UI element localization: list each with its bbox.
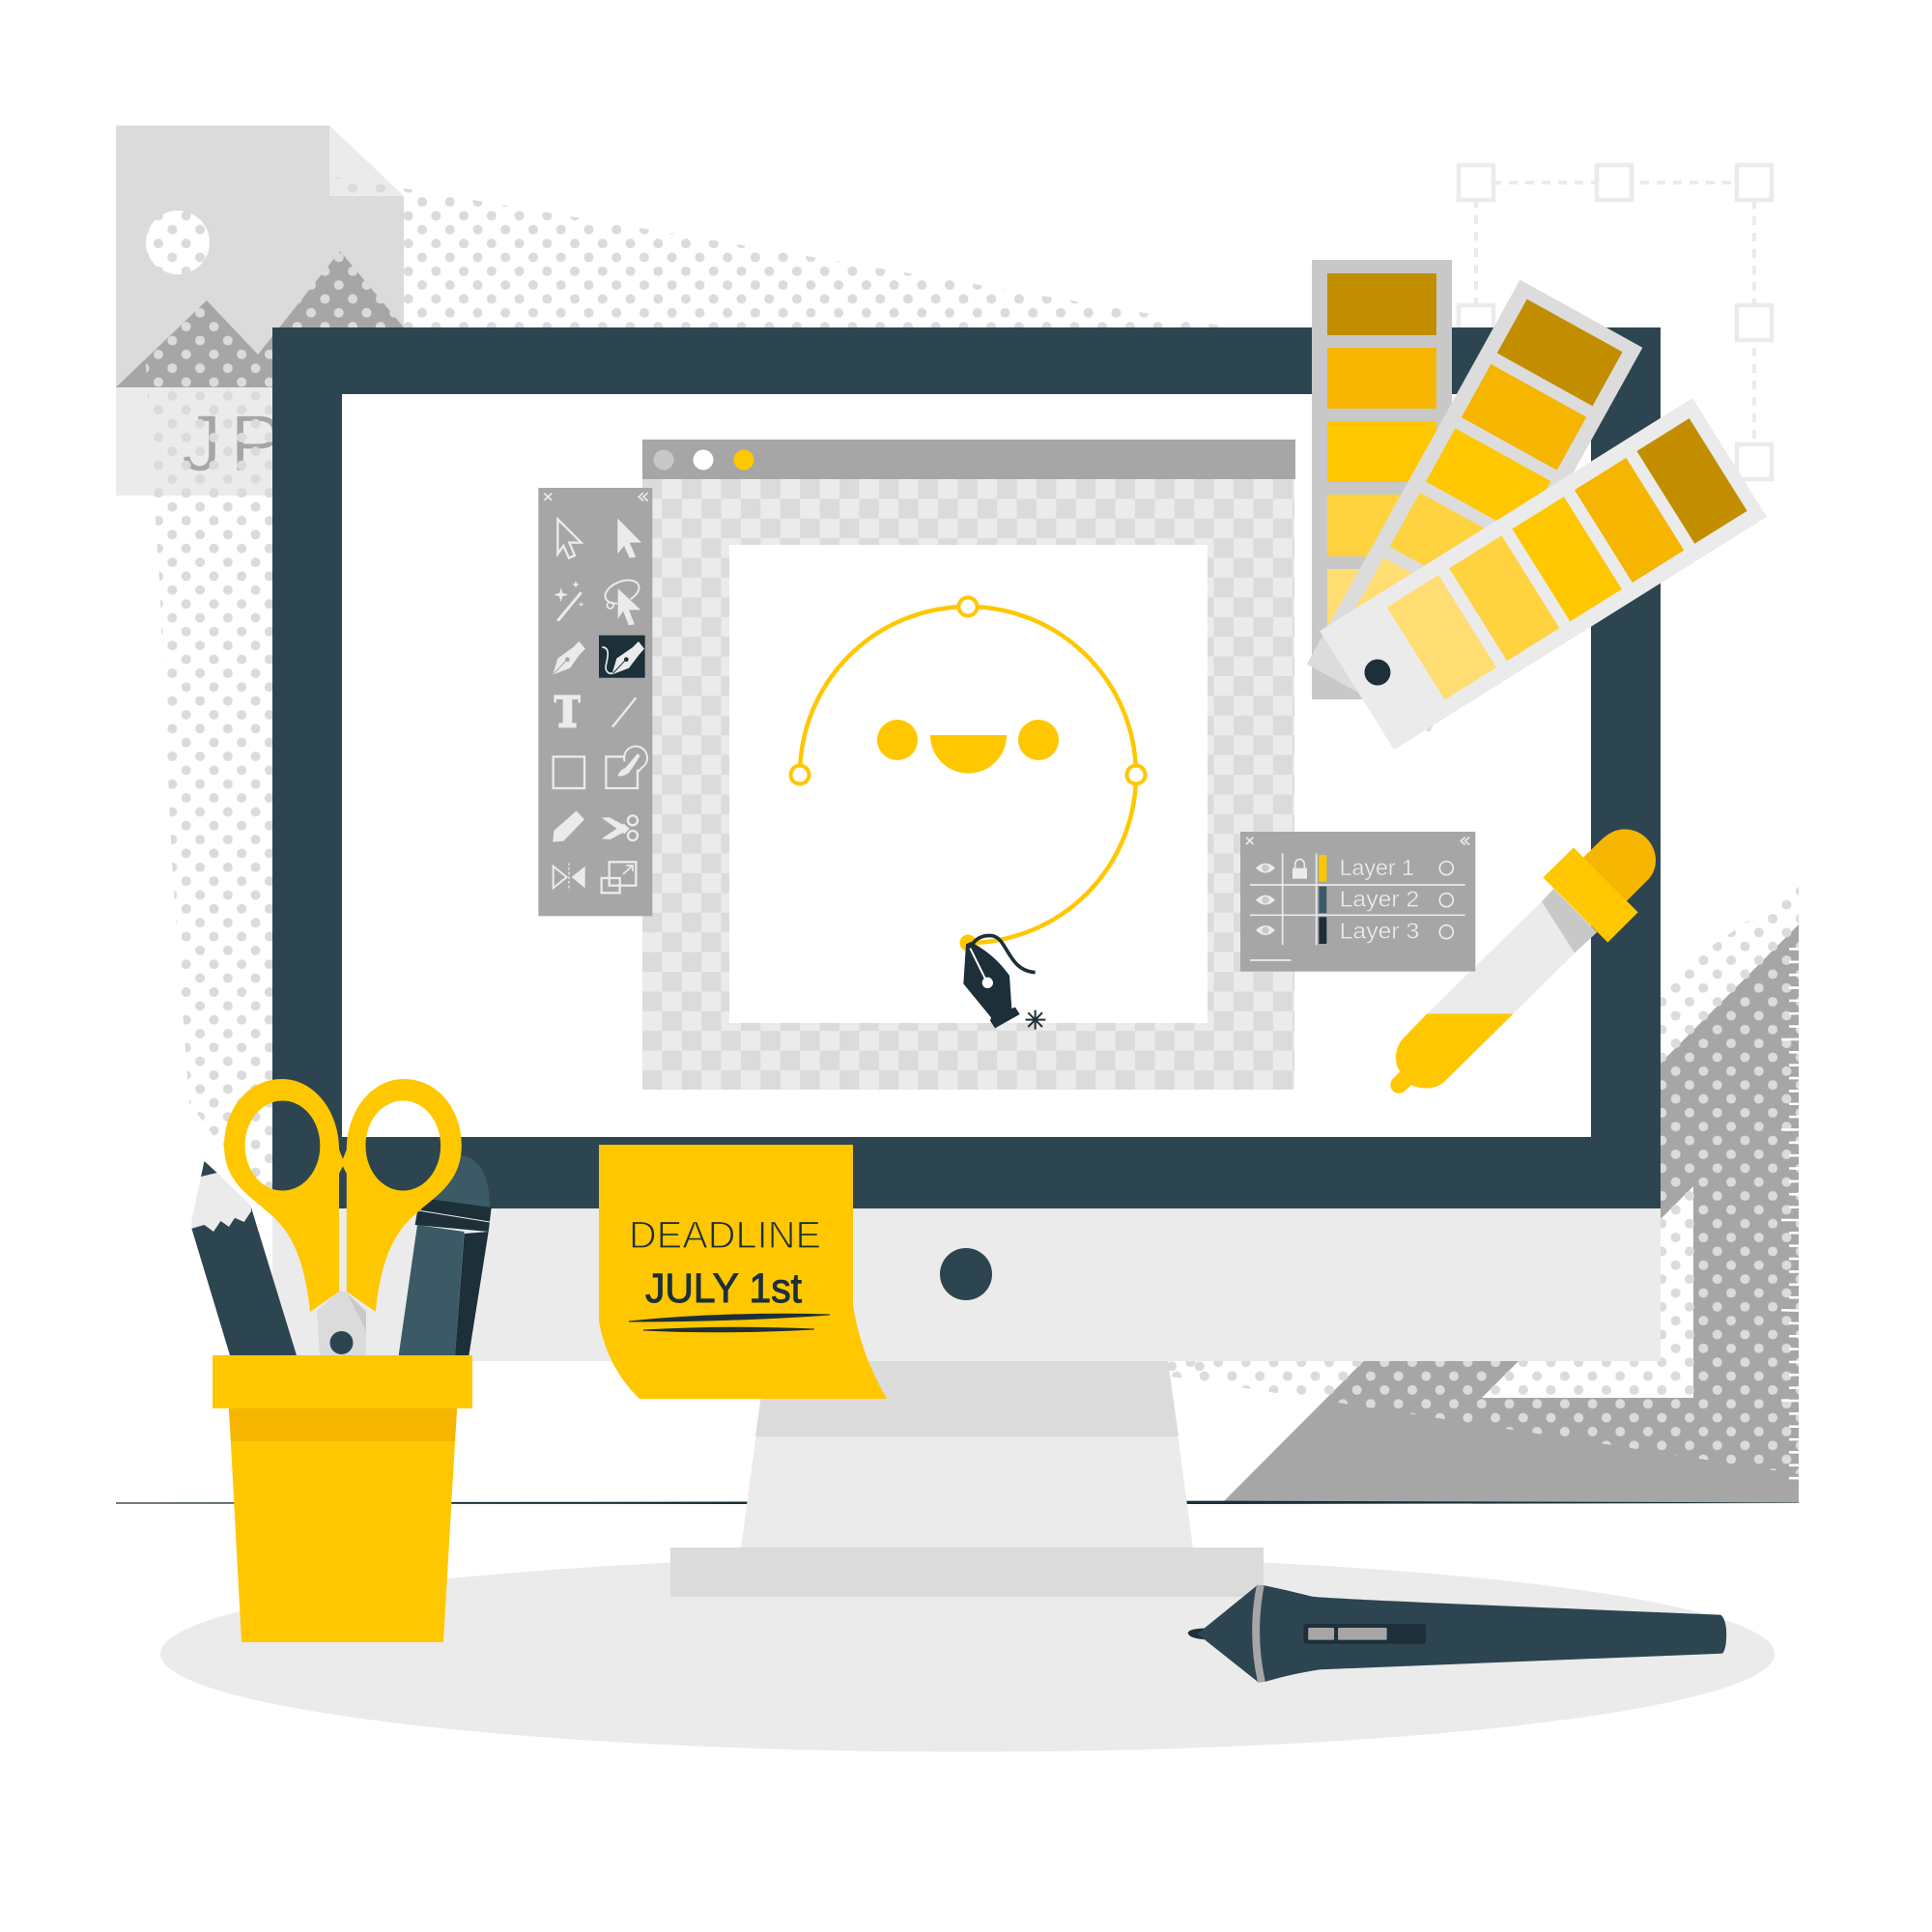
design app window (642, 440, 1295, 1090)
scissors (224, 1079, 462, 1355)
icon: reflect (554, 863, 585, 891)
swatch: tilted 29 degrees (1307, 280, 1642, 732)
icon: scissors (602, 815, 638, 840)
layers panel: Layer 2 (1340, 887, 1419, 912)
icon: pen (553, 641, 585, 674)
monitor (272, 327, 1661, 1361)
layers panel (1240, 832, 1475, 972)
pen holder contents (191, 1079, 492, 1355)
icon: pencil (553, 810, 584, 842)
smiley bezier drawing (790, 597, 1146, 951)
ruler ticks (1785, 942, 1795, 1480)
icon: line (612, 697, 636, 727)
icon: curvature pen selected (599, 636, 645, 678)
icon: selection arrow (557, 519, 582, 558)
icon: paint brush (606, 747, 647, 788)
marker (399, 1154, 492, 1355)
swatch: tilted 58 degrees (1320, 398, 1767, 750)
icon: lasso (602, 576, 642, 626)
date text: JULY 1st (645, 1265, 802, 1312)
layers panel: Layer 1 (1340, 855, 1414, 880)
selection handles (1459, 165, 1772, 479)
icon: type (554, 695, 581, 727)
dotted background pattern right (1159, 887, 1799, 1474)
deadline text: DEADLINE (629, 1214, 821, 1257)
layers panel: Layer 3 (1340, 919, 1419, 944)
dotted background pattern left (146, 145, 1220, 1375)
eyedropper (1390, 829, 1656, 1094)
stylus pen (1188, 1585, 1726, 1683)
pen tool cursor (963, 936, 1045, 1030)
tools panel (538, 488, 652, 916)
desk shadow (160, 1555, 1775, 1752)
icon: scale (602, 862, 636, 893)
yellow cup (213, 1355, 472, 1642)
icon: rectangle (554, 756, 584, 788)
colour swatches (1307, 260, 1767, 750)
sticky note (599, 1145, 887, 1399)
pencil (191, 1161, 297, 1355)
desk line (116, 1501, 1799, 1504)
icon: magic wand (554, 581, 584, 621)
underline strokes (629, 1314, 830, 1332)
icon: direct selection arrow (617, 519, 641, 558)
swatch: vertical (1312, 260, 1452, 699)
JPG file icon (116, 126, 404, 496)
JPG file icon: JPG (182, 398, 353, 488)
monitor stand (670, 1361, 1264, 1597)
background gray triangle (1223, 924, 1799, 1502)
